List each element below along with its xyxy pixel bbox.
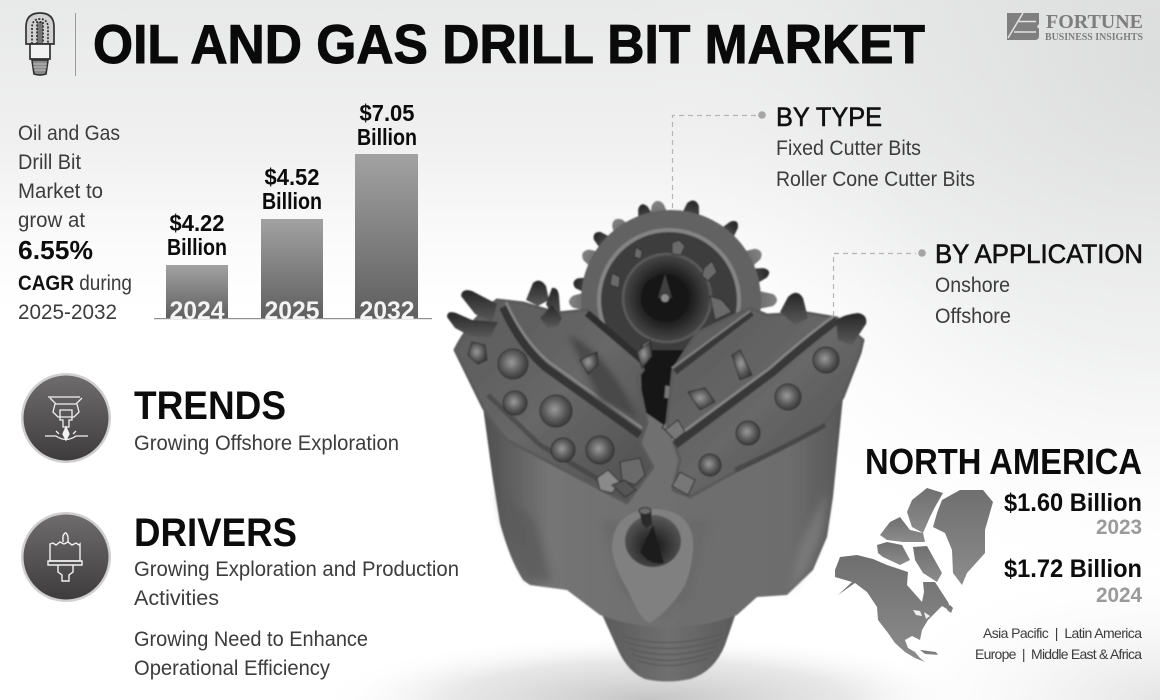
bit pin [600, 610, 737, 682]
text: by application items: Offshore [935, 305, 1011, 328]
icon: drivers drill bit [21, 512, 115, 606]
text: by application items [935, 274, 1011, 328]
text: trends item: Growing Offshore Exploration [134, 432, 399, 455]
gear cone [569, 198, 777, 390]
bar chart: market size: Billion [357, 124, 417, 150]
heading: drivers: DRIVERS [134, 511, 297, 555]
text: by type items: Fixed Cutter Bits [776, 137, 921, 160]
body shading [497, 490, 828, 620]
text block: market growth summary: grow at [18, 209, 85, 232]
illustration: tricone drill bit [447, 198, 866, 682]
right cone inserts [665, 347, 839, 495]
left cone teeth [447, 281, 562, 338]
logo: Fortune Business Insights [1007, 11, 1143, 43]
stats: north america market size: $1.72 Billion [1004, 555, 1142, 583]
text: by application items: Onshore [935, 274, 1010, 297]
nozzle housing [612, 509, 693, 623]
text block: market growth summary [18, 122, 132, 324]
text: by type items [776, 137, 975, 191]
map: north america [835, 488, 993, 662]
left cone shaded grooves [503, 307, 640, 435]
header divider [75, 13, 76, 76]
right cone teeth [780, 293, 866, 345]
text: drivers items [134, 558, 459, 680]
text: other regions [975, 625, 1142, 662]
bar chart: market size: 2032 [360, 297, 414, 325]
text block: market growth summary: CAGR during [18, 272, 132, 295]
logo: Fortune Business Insights: FORTUNE [1046, 11, 1143, 33]
title: OIL AND GAS DRILL BIT MARKET [93, 13, 925, 75]
text: by type items: Roller Cone Cutter Bits [776, 168, 975, 191]
text: other regions: Europe | Middle East & Africa [975, 646, 1142, 662]
bar chart: market size [154, 100, 432, 325]
gear teeth [572, 198, 772, 296]
heading: by application: BY APPLICATION [935, 239, 1143, 269]
text block: market growth summary: 2025-2032 [18, 301, 117, 324]
pin threads [622, 634, 722, 666]
callout: by type connector [672, 111, 766, 208]
heading: by type: BY TYPE [776, 102, 882, 132]
stats: north america market size: $1.60 Billion [1004, 489, 1142, 517]
map: great lakes [913, 610, 930, 619]
text block: market growth summary: Drill Bit [18, 151, 81, 174]
text: drivers items: Operational Efficiency [134, 657, 330, 680]
text: drivers items: Growing Exploration and Production [134, 558, 459, 581]
text block: market growth summary: 6.55% [18, 235, 93, 265]
center gap [640, 350, 695, 428]
text block: market growth summary: Oil and Gas [18, 122, 120, 145]
gear inserts [610, 240, 732, 320]
callout: by application connector [834, 249, 926, 316]
left cone inserts [468, 342, 652, 497]
right cone [667, 308, 863, 497]
stats: north america market size: 2024 [1096, 584, 1142, 607]
bar chart: market size: Billion [167, 234, 227, 260]
text: drivers items: Activities [134, 587, 219, 610]
logo: Fortune Business Insights: BUSINESS INSIGHTS [1045, 32, 1143, 43]
bar chart: market size: Billion [262, 188, 322, 214]
bar chart: market size: $4.52 [264, 164, 320, 190]
bar chart: market size: 2024 [170, 297, 225, 325]
text: drivers items: Growing Need to Enhance [134, 628, 368, 651]
icon: trends drilling machine [21, 373, 115, 467]
text block: market growth summary: Market to [18, 180, 103, 203]
bit body [483, 380, 843, 628]
text: other regions: Asia Pacific | Latin America [983, 625, 1142, 641]
icon: drill bit [26, 13, 54, 75]
bar chart: market size: $4.22 [170, 210, 224, 236]
bar chart: market size: 2025 [264, 297, 320, 325]
left cone [455, 300, 653, 503]
bar chart: market size: $7.05 [360, 100, 415, 126]
heading: trends: TRENDS [134, 384, 286, 428]
right cone shaded grooves [675, 320, 837, 445]
stats: north america market size [1004, 489, 1142, 607]
stats: north america market size: 2023 [1096, 516, 1142, 539]
